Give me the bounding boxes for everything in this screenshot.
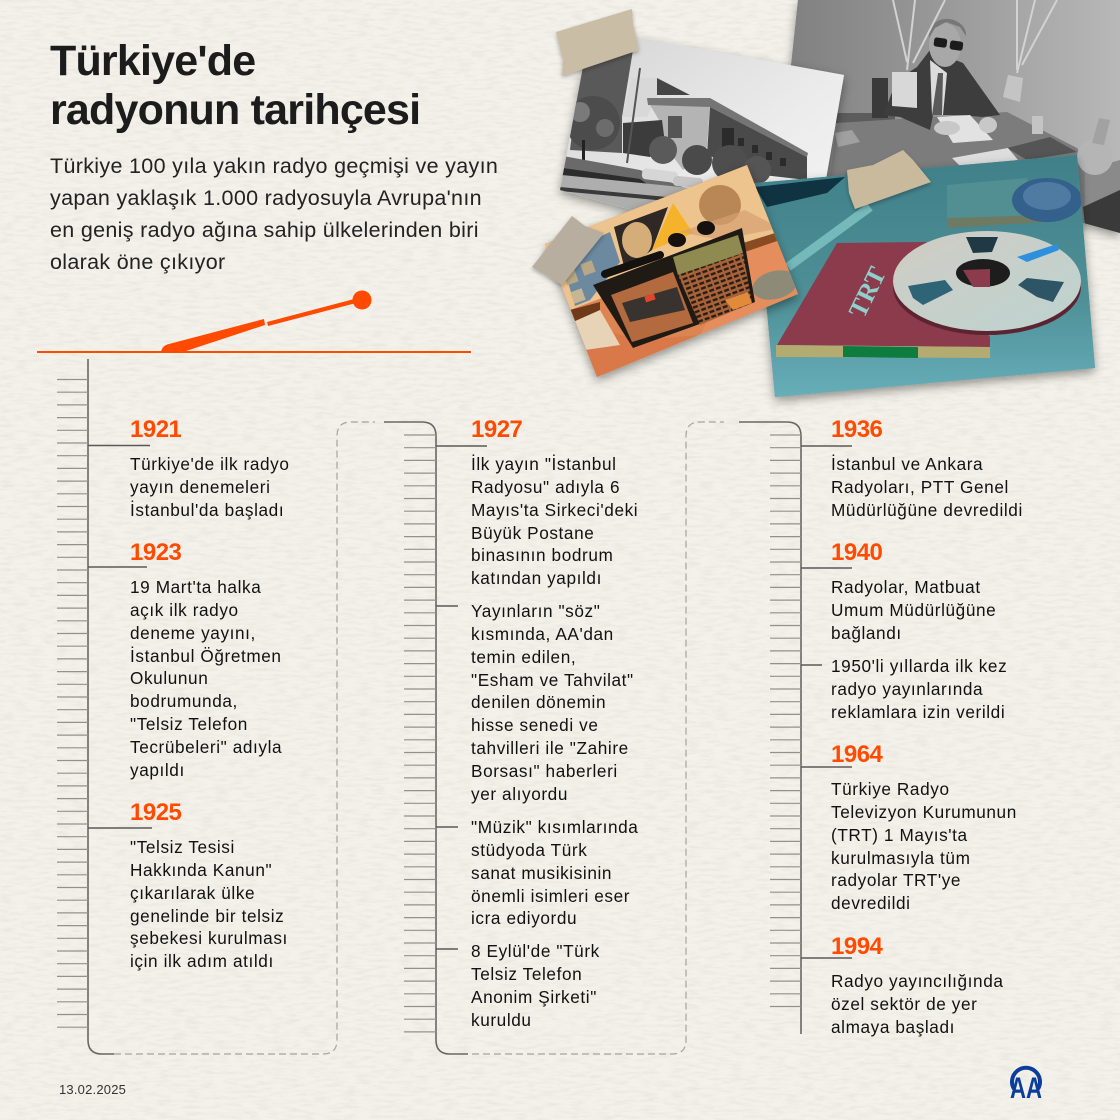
subtitle: olarak öne çıkıyor [50, 250, 225, 274]
text 1950s: 1950'li yıllarda ilk kez [831, 656, 1007, 676]
text 1927 second item: hisse senedi ve [471, 715, 598, 735]
text 1925: Hakkında Kanun" [130, 860, 272, 880]
text 1964: Türkiye Radyo [831, 779, 950, 799]
text 1923: Okulunun [130, 668, 208, 688]
ruler 3 [739, 422, 852, 1034]
text 1927 first item: Büyük Postane [471, 523, 594, 543]
year 1964: 1964 [831, 741, 882, 768]
year 1925: 1925 [130, 799, 181, 826]
text 1950s: radyo yayınlarında [831, 679, 983, 699]
text 1923: açık ilk radyo [130, 600, 239, 620]
text 1927 second item: temin edilen, [471, 647, 576, 667]
timeline rulers [57, 359, 852, 1055]
text 1927 second item: tahvilleri ile "Zahire [471, 738, 629, 758]
photo: TRT reels [750, 150, 1100, 400]
antenna illustration [37, 290, 471, 353]
text 1925: için ilk adım atıldı [130, 951, 274, 971]
antenna arm [161, 290, 372, 352]
text 1950s [831, 656, 1007, 722]
text 1927 third item [471, 817, 638, 928]
text 1927 first item: binasının bodrum [471, 545, 613, 565]
year 1921: 1921 [130, 416, 181, 443]
text 1923: bodrumunda, [130, 691, 238, 711]
text 1927 second item: denilen dönemin [471, 692, 606, 712]
text 1923 [130, 577, 282, 780]
text 1940: bağlandı [831, 623, 902, 643]
text 1936: Radyoları, PTT Genel [831, 477, 1009, 497]
text 1927 first item: İlk yayın "İstanbul [471, 454, 617, 474]
subtitle: yapan yaklaşık 1.000 radyosuyla Avrupa'nın [50, 186, 482, 210]
subtitle [50, 154, 498, 274]
text 1925: genelinde bir telsiz [130, 906, 284, 926]
subtitle: Türkiye 100 yıla yakın radyo geçmişi ve yayın [50, 154, 498, 178]
radio body [593, 221, 755, 348]
year 1994: 1994 [831, 933, 882, 960]
tape: left [532, 216, 604, 285]
text 1994: Radyo yayıncılığında [831, 971, 1004, 991]
text 1927 fourth item [471, 941, 600, 1030]
text 1925: "Telsiz Tesisi [130, 837, 235, 857]
text 1921: yayın denemeleri [130, 477, 270, 497]
text 1927 fourth item: 8 Eylül'de "Türk [471, 941, 600, 961]
text 1936: İstanbul ve Ankara [831, 454, 983, 474]
text 1927 fourth item: Telsiz Telefon [471, 964, 582, 984]
tape: top left [556, 9, 639, 76]
text 1927 third item: icra ediyordu [471, 908, 577, 928]
text 1964 [831, 779, 1017, 913]
text 1927 second item [471, 601, 634, 804]
text 1940: Radyolar, Matbuat [831, 577, 981, 597]
text 1927 second item: kısmında, AA'dan [471, 624, 614, 644]
text 1921: Türkiye'de ilk radyo [130, 454, 290, 474]
text 1927 fourth item: Anonim Şirketi" [471, 987, 597, 1007]
text 1921: İstanbul'da başladı [130, 500, 284, 520]
photo: TRT reels: TRT [843, 262, 892, 322]
text 1994 [831, 971, 1004, 1037]
text 1923: İstanbul Öğretmen [130, 646, 282, 666]
text 1964: (TRT) 1 Mayıs'ta [831, 825, 968, 845]
text 1927 third item: önemli isimleri eser [471, 886, 630, 906]
text 1923: Tecrübeleri" adıyla [130, 737, 282, 757]
text 1994: özel sektör de yer [831, 994, 977, 1014]
text 1927 first item: Radyosu" adıyla 6 [471, 477, 620, 497]
text 1925: şebekesi kurulması [130, 928, 288, 948]
text 1927 first item: Mayıs'ta Sirkeci'deki [471, 500, 638, 520]
text 1940: Umum Müdürlüğüne [831, 600, 996, 620]
text 1927 fourth item: kuruldu [471, 1010, 532, 1030]
date: 13.02.2025 [59, 1082, 126, 1097]
text 1927 second item: Borsası" haberleri [471, 761, 618, 781]
text 1964: radyolar TRT'ye [831, 870, 961, 890]
photo: studio speaker [780, 0, 1120, 240]
text 1964: devredildi [831, 893, 911, 913]
year 1927: 1927 [471, 416, 522, 443]
text 1923: 19 Mart'ta halka [130, 577, 261, 597]
text 1921 [130, 454, 290, 520]
text 1925 [130, 837, 288, 971]
orange baseline [37, 351, 471, 353]
text 1964: Televizyon Kurumunun [831, 802, 1017, 822]
ruler 2 [384, 422, 724, 1054]
photo: radio cassette player [530, 160, 805, 385]
text 1950s: reklamlara izin verildi [831, 702, 1005, 722]
text 1927 third item: stüdyoda Türk [471, 840, 587, 860]
text 1936 [831, 454, 1023, 520]
text 1964: kurulmasıyla tüm [831, 848, 970, 868]
year 1940: 1940 [831, 539, 882, 566]
text 1927 third item: "Müzik" kısımlarında [471, 817, 638, 837]
title: radyonun tarihçesi [50, 86, 420, 134]
photo collage [531, 0, 1120, 407]
photo: building [555, 35, 848, 216]
text 1927 third item: sanat musikisinin [471, 863, 612, 883]
text 1925: çıkarılarak ülke [130, 883, 255, 903]
subtitle: en geniş radyo ağına sahip ülkelerinden biri [50, 218, 479, 242]
ruler 1 [57, 359, 375, 1054]
text 1927 first item [471, 454, 638, 588]
text 1923: yapıldı [130, 760, 185, 780]
text 1927 first item: katından yapıldı [471, 568, 602, 588]
text 1940 [831, 577, 996, 643]
title: Türkiye'de [50, 37, 255, 85]
text 1923: deneme yayını, [130, 623, 256, 643]
title [50, 37, 420, 134]
tape: centre [847, 150, 931, 209]
year 1923: 1923 [130, 539, 181, 566]
text 1927 second item: "Esham ve Tahvilat" [471, 670, 634, 690]
text 1927 second item: Yayınların "söz" [471, 601, 600, 621]
year 1936: 1936 [831, 416, 882, 443]
text 1994: almaya başladı [831, 1017, 955, 1037]
text 1923: "Telsiz Telefon [130, 714, 248, 734]
text 1927 second item: yer alıyordu [471, 784, 568, 804]
text 1936: Müdürlüğüne devredildi [831, 500, 1023, 520]
